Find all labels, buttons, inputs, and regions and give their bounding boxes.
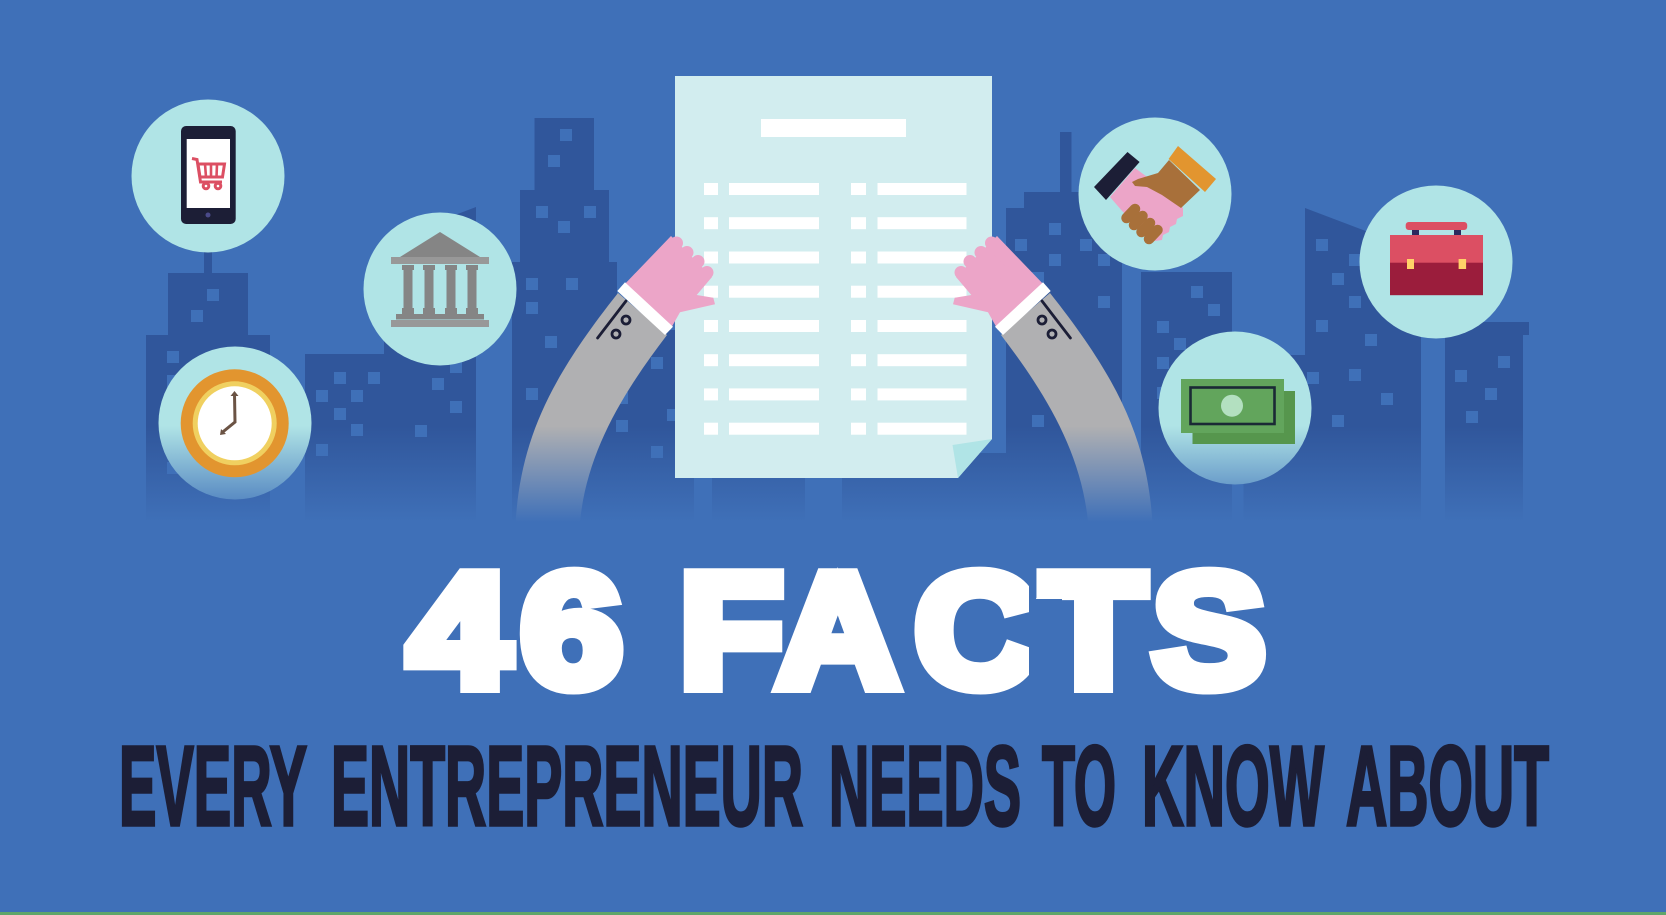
circle: shopping phone [132,100,284,252]
subtitle [119,723,1549,849]
right hand and cuff [953,236,1070,338]
icon: phone [181,126,236,224]
document heading bar [761,119,906,137]
title: 46 [408,541,622,721]
circle: handshake [1078,118,1232,270]
page fold [952,439,992,478]
circle: bank [364,212,516,366]
title: FACTS [680,541,1265,720]
subtitle: ENTREPRENEUR [331,723,803,849]
circle: clock [158,346,312,500]
bottom green edge [0,912,1666,915]
icon: handshake [1094,146,1216,241]
circle: briefcase [1360,186,1512,338]
document list rows [704,183,966,435]
icon: banknotes [1181,379,1295,444]
title [408,541,1265,721]
subtitle: NEEDS [829,723,1021,849]
city skyline [146,118,1529,522]
document sheet [675,76,992,478]
subtitle: KNOW [1142,723,1324,849]
subtitle: TO [1042,723,1116,849]
circle: money [1158,332,1312,484]
icon: bank building [391,232,489,327]
right sleeve [1001,293,1152,522]
subtitle: EVERY [119,723,307,849]
skyline fade [100,426,1566,526]
left hand and cuff [598,236,715,338]
icon: clock [181,369,289,477]
icon: briefcase [1390,222,1483,295]
left sleeve [516,293,667,522]
